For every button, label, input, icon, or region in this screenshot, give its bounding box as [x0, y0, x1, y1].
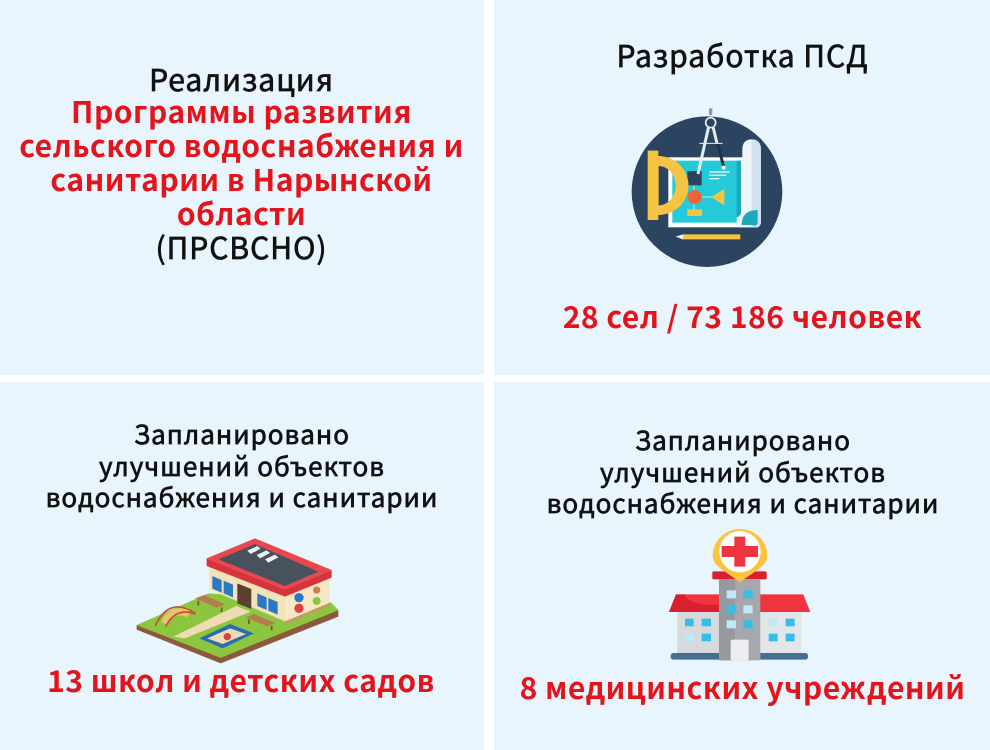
heading: programme title: области	[177, 190, 306, 234]
panel: schools	[0, 382, 484, 750]
stat: medical facilities: 8 медицинских учреждений	[520, 664, 965, 708]
heading: schools planned: водоснабжения и санитарии	[46, 478, 438, 515]
heading: schools planned: улучшений объектов	[99, 446, 385, 484]
heading: medical planned: улучшений объектов	[600, 452, 886, 490]
heading: programme title: сельского водоснабжения и	[19, 122, 464, 166]
heading: programme title: санитарии в Нарынской	[50, 156, 433, 200]
stat: villages and people: 28 сел / 73 186 человек	[563, 293, 922, 337]
heading: programme title: Программы развития	[71, 88, 412, 132]
panel: programme	[0, 0, 484, 375]
heading: medical planned: водоснабжения и санитарии	[547, 484, 939, 521]
heading: schools planned: Запланировано	[134, 415, 350, 452]
heading: medical planned	[547, 421, 939, 521]
heading: programme title	[19, 56, 464, 268]
panel: design documents	[494, 0, 990, 375]
icon: hospital with map pin	[669, 529, 810, 660]
icon: isometric school	[137, 538, 338, 663]
heading: programme title: Реализация	[149, 56, 334, 100]
stat: schools: 13 школ и детских садов	[47, 657, 435, 701]
panel: medical	[494, 382, 990, 750]
heading: schools planned	[46, 415, 438, 515]
icon: drafting blueprint	[632, 108, 782, 267]
heading: programme title: (ПРСВСНО)	[156, 224, 328, 268]
heading: design documents: Разработка ПСД	[616, 32, 869, 76]
heading: medical planned: Запланировано	[635, 421, 851, 458]
